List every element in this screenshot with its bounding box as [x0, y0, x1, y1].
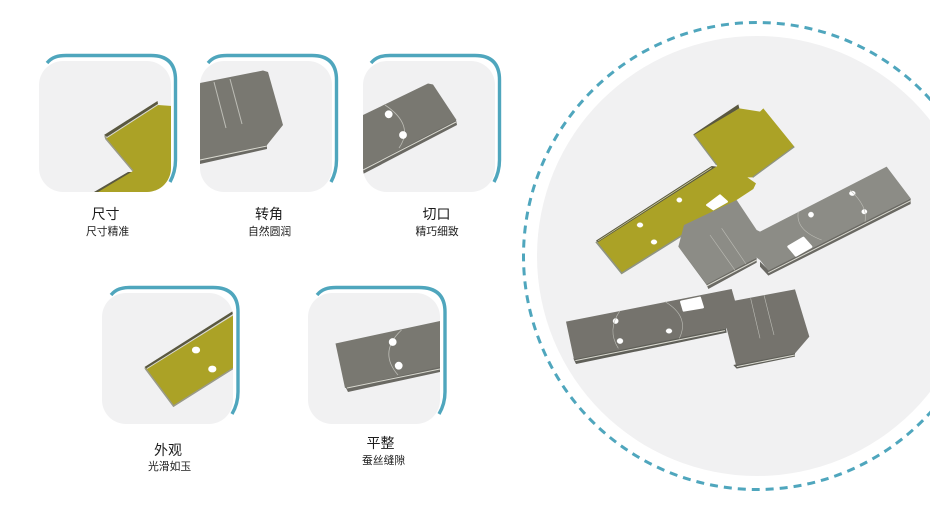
caption: corner: 自然圆润 — [248, 224, 291, 238]
dashed ring — [524, 22, 930, 490]
caption: appearance: 光滑如玉 — [148, 459, 191, 473]
photo: three metal parts — [566, 104, 911, 369]
photo: grey part end — [363, 84, 457, 174]
heading: cut: 切口 — [422, 206, 450, 222]
photo: grey part strip — [336, 321, 440, 392]
large grey circle background — [537, 36, 930, 476]
heading: appearance: 外观 — [154, 442, 182, 458]
heading: flatness: 平整 — [366, 435, 394, 451]
heading: size: 尺寸 — [92, 206, 120, 222]
heading: corner: 转角 — [255, 206, 283, 222]
panel: cut — [363, 56, 500, 192]
photo: grey part corner — [200, 70, 283, 164]
part: grey lower — [566, 289, 809, 369]
panel: size — [39, 56, 176, 192]
part: grey middle — [678, 167, 911, 289]
panel: appearance — [102, 288, 238, 424]
panel: corner — [200, 56, 336, 192]
photo: yellow part corner — [94, 101, 172, 192]
caption: flatness: 蚕丝缝隙 — [362, 453, 405, 467]
caption: size: 尺寸精准 — [86, 224, 129, 238]
photo: yellow part strip — [144, 311, 233, 406]
caption: cut: 精巧细致 — [416, 224, 459, 238]
panel: flatness — [308, 288, 445, 424]
part: yellow backed — [596, 104, 794, 274]
